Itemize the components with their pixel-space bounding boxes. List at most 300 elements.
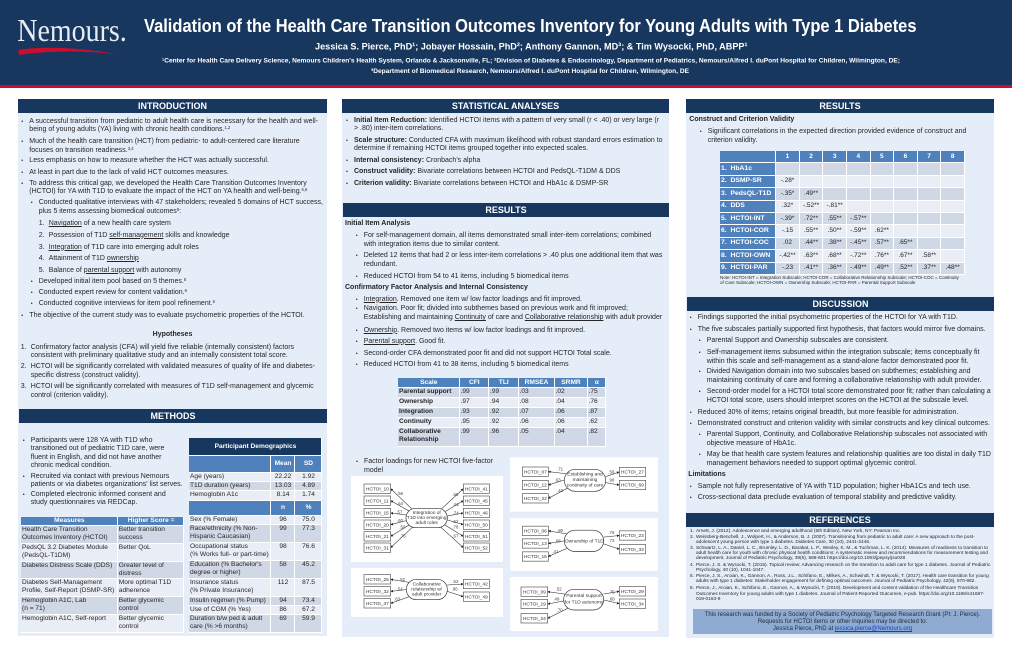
text block: reference list: Outcomes Inventory for young adults with type 1 diabetes. Journal of Patient-Reported Outcomes, e-pub. https://doi.org/10.1186/s41687- [696, 592, 984, 597]
text block: confirmatory factor analysis [345, 284, 662, 368]
table: scale fit statistics: TLI [499, 378, 509, 386]
text block: statistical analyses bullets: determine if remaining HCTOI items grouped together into expected scales. [354, 145, 588, 152]
table: scale fit statistics: .08 [520, 398, 529, 405]
diagram: collaborative relationship factor: .53 [452, 579, 459, 584]
text block: introduction bullets: Conducted expert review for content validation.6 [39, 288, 187, 296]
diagram: collaborative relationship factor: .63 [394, 596, 401, 601]
table: participant demographics: Hemoglobin A1c [190, 491, 238, 498]
table: correlation matrix: .76** [875, 252, 889, 259]
table: participant demographics: SD [304, 460, 313, 467]
table: correlation matrix: .32* [782, 202, 793, 209]
table: measures: Outcomes Inventory (HCTOI) [22, 534, 108, 541]
text block: introduction bullets: Developed initial item pool based on 5 themes.6 [39, 277, 186, 285]
diagram: collaborative relationship factor: relationship w/ [411, 586, 443, 592]
diagram: integration factor: .61 [453, 502, 460, 507]
table: correlation matrix: .55** [828, 215, 842, 222]
table: participant demographics: 59.9 [302, 615, 315, 622]
text block: introduction bullets: Possession of T1D self-management skills and knowledge [49, 232, 230, 239]
diagram: ownership factor: .80 [557, 528, 564, 533]
text block: limitations: Sample not fully representative of YA with T1D population; higher HbA1Cs and tech use. [698, 483, 971, 490]
table: participant demographics: Race/ethnicity (% Non- [190, 525, 257, 532]
text block: introduction bullets: The objective of the current study was to evaluate psychometric properties of the HCTOI. [29, 312, 305, 319]
text block: confirmatory factor analysis: Parental support. Good fit. [364, 338, 445, 345]
diagram: ownership factor [510, 518, 658, 571]
table: measures: control [119, 605, 139, 612]
text block: hypotheses: HCTOI will be significantly correlated with validated measures of quality of life and diabetes- [31, 363, 315, 370]
table: scale fit statistics: .99 [490, 388, 499, 395]
heading: introduction: INTRODUCTION [138, 101, 207, 111]
table: correlation matrix: -.23 [782, 264, 793, 271]
table: participant demographics: T1D duration (years) [190, 482, 250, 489]
text block: initial item analysis [345, 220, 662, 280]
diagram: continuity factor: .43 [557, 488, 564, 493]
text block: reference list: 019-0163-9 [696, 597, 720, 602]
table: scale fit statistics: .92 [490, 418, 499, 425]
text block: initial item analysis: redundant. [364, 261, 397, 268]
table: correlation matrix: -.57** [850, 215, 866, 222]
diagram: continuity factor: HCTOI_22 [524, 496, 547, 502]
text block: discussion bullets: Parental Support and Ownership subscales are consistent. [707, 337, 889, 344]
text block: discussion bullets: May be that health care system features and relationship qualities are too distal in daily T1D [707, 451, 991, 458]
panel: introduction [18, 99, 327, 409]
table: measures: Better QoL [119, 544, 151, 551]
diagram: ownership factor: HCTOI_23 [621, 533, 644, 539]
table: participant demographics: 1.74 [302, 491, 315, 498]
table: correlation matrix: -.59** [850, 227, 866, 234]
heading: introduction [18, 99, 327, 113]
table: scale fit statistics: .76 [588, 398, 598, 405]
table: correlation matrix: -.39* [781, 215, 794, 222]
diagram: collaborative relationship factor: HCTOI_32 [366, 589, 389, 595]
table: scale fit statistics: .04 [556, 398, 565, 405]
text block: discussion bullets: within this scale and self-management as a stand-alone factor demonstrated poor fit. [707, 358, 969, 365]
diagram: continuity factor: HCTOI_12 [524, 483, 547, 489]
text block: reference list: Pierce, J. S., Aroian, K., Gannon, A., Ross, J.L., Schifano, E., Milkes, A., Schwindt, T. & Wysocki, T. (2017). Health care transition for young [696, 574, 989, 579]
text block: limitations: Cross-sectional data preclude evaluation of temporal stability and predictive validity. [698, 494, 957, 501]
table: participant demographics: 96 [279, 516, 287, 523]
diagram: integration factor: HCTOI_21 [366, 534, 389, 540]
text block: initial item analysis: Initial Item Analysis [345, 220, 410, 227]
text block: discussion bullets: The five subscales partially supported first hypothesis, that factors would mirror five domains. [698, 326, 986, 333]
diagram: collaborative relationship factor [351, 568, 503, 617]
heading: references [686, 513, 994, 527]
text block: reference list: Pierce, J., Aroian, K., Schifano, E., Gannon, A., & Wysocki, T. (2019). Development and content validation of the Healthcare Transition [696, 586, 978, 591]
table: scale fit statistics: .62 [588, 418, 598, 425]
header banner [0, 0, 1012, 85]
text block: confirmatory factor analysis: Second-order CFA demonstrated poor fit and did not support HCTOI Total scale. [364, 350, 612, 357]
text block: introduction bullets: 4. [39, 255, 45, 262]
table: participant demographics: Use of CGM (% Yes) [190, 606, 251, 613]
table note [720, 275, 959, 285]
table: participant demographics: 73.4 [302, 597, 315, 604]
text block: methods bullets: patients or via diabetes organizations' list serves. [31, 481, 183, 488]
diagram: integration factor: .56 [397, 491, 404, 496]
panel: methods [18, 409, 327, 636]
text block: introduction bullets: focuses on transition readiness.3,4 [29, 146, 134, 154]
diagram: continuity factor: .71 [557, 467, 564, 472]
text block: introduction bullets: (HCTOI) for YA with T1D to evaluate the impact of the HCT on YA health and well-being.5,6 [29, 187, 307, 195]
text block: introduction bullets: Attainment of T1D ownership [49, 255, 139, 262]
diagram: continuity factor: maintaining [573, 477, 598, 483]
table: measures: control [119, 623, 139, 630]
table: participant demographics: 75.0 [302, 516, 315, 523]
text block: initial item analysis: Reduced HCTOI from 54 to 41 items, including 5 biomedical items [364, 273, 569, 280]
text block: discussion bullets: Findings supported the initial psychometric properties of the HCTOI for YA with T1D. [698, 314, 958, 321]
table: scale fit statistics: .04 [556, 428, 565, 435]
table: measures: Better glycemic [119, 615, 164, 622]
table: participant demographics: Duration b/w ped & adult [190, 615, 262, 622]
table: correlation matrix: -.28* [781, 177, 794, 184]
diagram: ownership factor: .68 [555, 538, 561, 544]
table: participant demographics: (% Private Insurance) [190, 587, 253, 594]
text block: introduction bullets: Less emphasis on how to measure whether the HCT was actually successful. [29, 157, 269, 164]
table: participant demographics: Insulin regimen (% Pump) [190, 597, 266, 604]
diagram: parental support factor: HCTOI_09 [523, 589, 546, 595]
table: correlation matrix: .52** [898, 264, 912, 271]
table: participant demographics: care (% >6 months) [190, 623, 248, 630]
diagram: continuity factor: .98 [608, 477, 615, 482]
table: correlation matrix: .36** [828, 264, 842, 271]
panel: references [686, 513, 994, 638]
diagram: parental support factor: .70 [557, 607, 563, 612]
diagram: parental support factor: .68 [609, 596, 615, 601]
text block: hypotheses: specific distress (construct validity). [31, 372, 140, 379]
callout: funding and contact: Jessica Pierce, PhD at jessica.pierce@Nemours.org [773, 626, 912, 632]
text block: introduction bullets: Integration of T1D care into emerging adult roles [49, 244, 199, 251]
table: scale fit statistics: .02 [556, 388, 565, 395]
text block: introduction bullets: 1. [39, 220, 45, 227]
text block: reference list: Weissberg-Benchell, J., Wolpert, H., & Anderson, B. J. (2007). Transitioning from pediatric to adult care: A new approach to the post- [696, 535, 975, 540]
text block: statistical analyses bullets: Initial Item Reduction: Identified HCTOI items with a pattern of very small (r < .40) or very large (r [354, 117, 659, 124]
diagram: integration factor: Integration of [413, 510, 441, 516]
panel: results (middle) [342, 203, 669, 637]
table: participant demographics: Occupational status [190, 543, 248, 550]
text block: limitations: Limitations [688, 471, 726, 478]
table: scale fit statistics: Collaborative [399, 428, 441, 435]
table: participant demographics: Mean [275, 460, 291, 467]
table: correlation matrix: .55** [804, 227, 818, 234]
heading: statistical analyses: STATISTICAL ANALYSES [452, 101, 559, 111]
table: correlation matrix: 3 [833, 153, 836, 160]
text block: construct and criterion validity: Significant correlations in the expected direction provided evidence of construct and [708, 128, 966, 135]
table: scale fit statistics: α [595, 378, 599, 386]
text block: factor loadings note [356, 458, 493, 474]
diagram: ownership factor: HCTOI_33 [621, 547, 644, 553]
diagram: parental support factor: .49 [553, 596, 560, 601]
text block: reference list: adults with type 1 diabetes: Stakeholder engagement for defining optimal outcomes. Journal of Pediatric Psychology, 42(9), 970-982. [696, 579, 976, 584]
table: correlation matrix: 1 [786, 153, 789, 160]
table: correlation matrix: .41** [804, 264, 818, 271]
table: participant demographics: 99 [279, 525, 287, 532]
text block: methods bullets: Participants were 128 YA with T1D who [31, 437, 152, 444]
text block: statistical analyses bullets: Internal consistency: Cronbach's alpha [354, 157, 480, 164]
diagram: parental support factor [510, 577, 658, 631]
table: scale fit statistics: RMSEA [525, 378, 548, 386]
diagram: collaborative relationship factor: .54 [397, 587, 403, 592]
text block: introduction bullets: Balance of parental support with autonomy [49, 267, 181, 274]
text block: discussion bullets: HCTOI total score, users should interpret scores on the HCTOI at the subscale level. [707, 397, 969, 404]
table: scale fit statistics: .93 [460, 408, 470, 415]
table: participant demographics: 1.92 [302, 473, 315, 480]
table: correlation matrix: .50** [828, 227, 842, 234]
diagram: integration factor: HCTOI_51 [465, 534, 488, 540]
table: correlation matrix: 8 [951, 153, 954, 160]
table: scale fit statistics: Relationship [399, 436, 439, 443]
table: participant demographics: 58 [279, 561, 287, 568]
text block: methods bullets: fluent in English, and did not have another [31, 454, 161, 461]
text block: construct and criterion validity: criterion validity. [708, 137, 757, 144]
table: scale fit statistics: Continuity [399, 418, 432, 425]
table: correlation matrix: -.42** [779, 252, 796, 259]
panel: results (right) [686, 99, 994, 297]
table: correlation matrix: -.15 [782, 227, 793, 234]
diagram: collaborative relationship factor: Collaborative [413, 581, 441, 587]
text block: statistical analyses bullets: Construct validity: Bivariate correlations between HCTOI and PedsQL-T1DM & DDS [354, 168, 620, 175]
diagram: ownership factor: HCTOI_16 [524, 554, 547, 560]
table: correlation matrix: -.72** [850, 252, 866, 259]
diagram: collaborative relationship factor: HCTOI_37 [366, 601, 389, 607]
heading: discussion [687, 297, 994, 311]
table: measures: Health Care Transition [22, 526, 88, 533]
table: scale fit statistics: .96 [490, 428, 499, 435]
table: measures: Hemoglobin A1C, Self-report [22, 615, 106, 622]
table: correlation matrix: .48** [946, 264, 960, 271]
text block: statistical analyses bullets: Criterion validity: Bivariate correlations between HCTOI and HbA1c & DSMP-SR [354, 180, 608, 187]
diagram: integration factor: .78 [452, 525, 459, 530]
heading: discussion: DISCUSSION [812, 299, 868, 309]
text block: discussion bullets: maintaining continuity of care and forming a collaborative relationship with adult provider. [707, 377, 981, 384]
text block: confirmatory factor analysis: Navigation. Poor fit; divided into subthemes based on previous work and fit improved; [364, 305, 628, 312]
text block: introduction bullets: 2. [39, 232, 45, 239]
diagram: parental support factor: .52 [556, 586, 562, 591]
text block: construct and criterion validity: Construct and Criterion Validity [689, 116, 794, 123]
table: scale fit statistics: .07 [520, 408, 529, 415]
text block: introduction bullets: A successful transition from pediatric to adult health care is necessary for the health and well- [29, 118, 318, 125]
diagram: collaborative relationship factor: adult provider [412, 591, 442, 597]
text block: methods bullets: chronic medical condition. [31, 462, 111, 469]
table: participant demographics: 86 [279, 606, 287, 613]
text block: reference list: development. Journal of Pediatric Psychology, 39(6), 588-601 https://doi.org/10.1093/jpepsy/jsu028 [696, 556, 905, 561]
text block: introduction bullets: At least in part due to the lack of valid HCT outcomes measures. [29, 169, 229, 176]
table: measures: Measures [54, 517, 85, 524]
text block: reference list: 6. [690, 586, 694, 591]
table: correlation matrix: -.52** [803, 202, 819, 209]
text block: methods bullets: Recruited via contact with previous Nemours [31, 473, 169, 480]
text block: reference list: Arnett, J. (2012). Adolescence and emerging adulthood (5th Edition). New York, NY: Pearson Inc. [696, 529, 901, 534]
table: participant demographics: 8.14 [277, 491, 289, 498]
table: scale fit statistics: SRMR [561, 378, 581, 386]
table: scale fit statistics: .95 [460, 418, 470, 425]
table: measures: success [119, 534, 143, 541]
heading: results [343, 203, 669, 217]
diagram: integration factor: .66 [452, 492, 459, 497]
table: scale fit statistics: .94 [490, 398, 499, 405]
table: correlation matrix: 1. HbA1c [721, 165, 752, 172]
heading: statistical analyses [342, 99, 669, 113]
diagram: integration factor [351, 476, 503, 562]
text block: methods bullets [23, 436, 183, 506]
logo: Nemours: Nemours. [17, 12, 127, 48]
text block: reference list: adolescent young person with type 1 diabetes. Diabetes Care, 30 (10), 2441-2446. [696, 540, 870, 545]
text block: introduction bullets: plus 5 items assessing biomedical outcomes5: [39, 207, 181, 215]
table: participant demographics: 69 [279, 615, 287, 622]
heading: results: RESULTS [485, 205, 527, 215]
table: participant demographics: Insurance status [190, 579, 238, 586]
table: scale fit statistics: .99 [460, 388, 470, 395]
authors: Jessica S. Pierce, PhD¹; Jobayer Hossain, PhD²; Anthony Gannon, MD³; & Tim Wysocki, PhD, ABPP¹ [315, 41, 748, 51]
table: measures [21, 517, 184, 633]
diagram: integration factor: HCTOI_11 [366, 498, 389, 504]
table: participant demographics: 87.5 [302, 579, 315, 586]
text block: methods bullets: transitioned out of pediatric T1D care, were [31, 445, 164, 452]
table: scale fit statistics: .99 [460, 428, 470, 435]
diagram: integration factor: HCTOI_45 [465, 498, 488, 504]
diagram: integration factor: T1D into emerging [407, 515, 447, 521]
table: correlation matrix: .58** [922, 252, 936, 259]
table: correlation matrix: .72** [804, 215, 818, 222]
diagram: continuity factor [510, 458, 658, 512]
text block: reference list: 2. [690, 535, 694, 540]
text block: statistical analyses bullets [346, 116, 663, 187]
table: correlation matrix: .68** [828, 252, 842, 259]
text block: introduction bullets: Conducted cognitive interviews for item pool refinement.6 [39, 299, 215, 307]
diagram: parental support factor: HCTOI_24 [523, 616, 546, 622]
table: correlation matrix: .62** [875, 227, 889, 234]
diagram: integration factor: HCTOI_20 [366, 522, 389, 528]
table: correlation matrix: -.81** [827, 202, 843, 209]
text block: hypotheses: 3. [21, 383, 27, 390]
text block: introduction bullets: To address this critical gap, we developed the Health Care Transition Outcomes Inventory [29, 180, 307, 187]
table: participant demographics: Participant Demographics [215, 442, 296, 450]
diagram: continuity factor: continuity of care [567, 483, 604, 489]
text block: discussion bullets [690, 314, 991, 467]
diagram: ownership factor: .76 [608, 530, 615, 535]
diagram: parental support factor: HCTOI_34 [621, 601, 644, 607]
table: measures: PedsQL 3.2 Diabetes Module [22, 544, 108, 551]
table note: Note: HCTOI-INT = Integration Subscale; HCTOI-COR = Collaborative Relationship Subscale; HCTOI-COC = Continuity [720, 275, 959, 280]
diagram: continuity factor: HCTOI_27 [621, 470, 644, 476]
table: correlation matrix: 3. PedsQL-T1D [721, 190, 771, 197]
diagram: integration factor: adult roles [416, 520, 438, 526]
table: measures: adherence [119, 587, 150, 594]
text block: factor loadings note: Factor loadings for new HCTOI five-factor [364, 458, 493, 465]
table: correlation matrix: .37** [922, 264, 936, 271]
diagram: ownership factor: Ownership of T1D [565, 538, 604, 544]
table: correlation matrix: 4. DDS [721, 202, 745, 209]
table: scale fit statistics: .92 [490, 408, 499, 415]
text block: discussion bullets: Divided Navigation domain into two subscales based on subthemes; establishing and [707, 368, 971, 375]
table: scale fit statistics: .75 [588, 388, 598, 395]
diagram: integration factor: .60 [397, 518, 404, 523]
text block: introduction bullets: Much of the health care transition (HCT) from pediatric- to adult-centered care literature [29, 138, 300, 145]
diagram: integration factor: .75 [400, 534, 406, 539]
table: correlation matrix: .02 [783, 239, 792, 246]
table: scale fit statistics: .97 [460, 398, 470, 405]
text block: reference list: 4. [690, 563, 694, 568]
table: measures: Greater level of [119, 562, 164, 568]
text block: discussion bullets: Reduced 30% of items; retains original breadth, but more feasible for administration. [698, 409, 958, 416]
diagram: collaborative relationship factor: .52 [399, 577, 406, 582]
table: measures: Hemoglobin A1C, Lab [22, 597, 86, 604]
table: scale fit statistics: .06 [556, 408, 565, 415]
text block: discussion bullets: Demonstrated construct and criterion validity with similar constructs and key clinical outcomes. [698, 420, 990, 427]
diagram: continuity factor: .58 [608, 470, 615, 475]
diagram: integration factor: HCTOI_10 [366, 486, 389, 492]
diagram: integration factor: HCTOI_15 [366, 511, 389, 517]
table: measures: (n = 71) [22, 605, 45, 612]
table: correlation matrix: 5 [880, 153, 884, 160]
table: scale fit statistics: .05 [520, 428, 529, 435]
heading: methods: METHODS [150, 411, 196, 421]
table: correlation matrix: -.45** [850, 239, 866, 246]
text block: confirmatory factor analysis: Ownership. Removed two items w/ low factor loadings and fit improved. [364, 327, 585, 334]
diagram: continuity factor: Establishing and [567, 471, 603, 477]
diagram: integration factor: HCTOI_41 [465, 486, 488, 492]
diagram: collaborative relationship factor: HCTOI_25 [366, 577, 389, 583]
text block: reference list [690, 528, 990, 602]
table: correlation matrix: 9. HCTOI-PAR [721, 264, 768, 271]
table: scale fit statistics: .82 [588, 428, 598, 435]
table: participant demographics: 13.03 [275, 482, 291, 489]
table: participant demographics: degree or higher) [190, 569, 241, 576]
table: correlation matrix: .49** [804, 190, 818, 197]
table: participant demographics: Age (years) [190, 473, 224, 480]
diagram: integration factor: .62 [452, 519, 459, 524]
text block: initial item analysis: Deleted 12 items that had 2 or less inter-item correlations > .40 plus one additional item that was [364, 252, 662, 259]
diagram: integration factor: .57 [396, 510, 403, 515]
diagram: integration factor: .74 [453, 511, 459, 516]
text block: reference list: adult health care for youth with chronic physical health conditions: A systematic review and recommendations for measurement testing and [696, 551, 988, 556]
table: participant demographics: 76.6 [302, 543, 315, 550]
diagram: continuity factor: .63 [555, 477, 561, 482]
table: correlation matrix: .65** [898, 239, 912, 246]
text block: statistical analyses bullets: > .80) inter-item correlations. [354, 125, 443, 132]
text block: discussion bullets: Self-management items subsumed within the integration subscale; items conceptually fit [707, 349, 979, 356]
text block: hypotheses [21, 330, 315, 399]
text block: reference list: Pierce, J. S. & Wysocki, T. (2015). Topical review: Advancing research on the transition to adult care for type 1 diabetes. Journal of Pediatric [696, 563, 990, 568]
callout: funding and contact: Requests for HCTOI items or other inquiries may be directed to: [758, 619, 927, 625]
text block: confirmatory factor analysis: Confirmatory Factor Analysis and Internal Consistency [345, 284, 528, 291]
table: correlation matrix: 5. HCTOI-INT [721, 215, 765, 222]
diagram: ownership factor: .73 [608, 538, 615, 543]
callout: funding and contact [693, 609, 992, 634]
text block: confirmatory factor analysis: Establishing and maintaining Continuity of care and Collaborative relationship with adult provider [364, 314, 662, 321]
diagram: ownership factor: HCTOI_06 [524, 529, 547, 535]
table: scale fit statistics: Integration [399, 408, 433, 415]
affiliations [162, 57, 900, 75]
text block: discussion bullets: Parental Support, Continuity, and Collaborative Relationship subscales not associated with [707, 431, 987, 438]
text block: reference list: 3. [690, 546, 694, 551]
table: participant demographics: n [281, 504, 285, 511]
text block: hypotheses: HCTOI will be significantly correlated with measures of T1D self-management and glycemic [31, 383, 314, 390]
table: measures: Better transition [119, 526, 165, 533]
title: Validation of the Health Care Transition Outcomes Inventory for Young Adults with Type 1 Diabetes [144, 15, 916, 36]
text block: introduction bullets: Navigation of a new health care system [49, 220, 171, 227]
diagram: integration factor: HCTOI_46 [465, 511, 488, 517]
table: correlation matrix: 7. HCTOI-COC [721, 239, 769, 246]
table: participant demographics: 45.2 [302, 561, 315, 568]
table: correlation matrix: -.49** [850, 264, 866, 271]
table: correlation matrix: .63** [804, 252, 818, 259]
text block: reference list: Schwartz, L. A., Daniel, L. C., Brumley, L. D., Barakat, L. P., Wesley, K. M., & Tuchman, L. K. (2014). Measures of readiness to transition to [696, 546, 988, 551]
text block: hypotheses: control (criterion validity). [31, 392, 108, 399]
diagram: integration factor: HCTOI_50 [465, 522, 488, 528]
table: scale fit statistics [398, 378, 606, 447]
table: correlation matrix: 7 [927, 153, 931, 160]
diagram: parental support factor: Parental support [566, 593, 602, 599]
table: correlation matrix: 6. HCTOI-COR [721, 227, 769, 234]
text block: methods bullets: Completed electronic informed consent and [31, 491, 166, 498]
